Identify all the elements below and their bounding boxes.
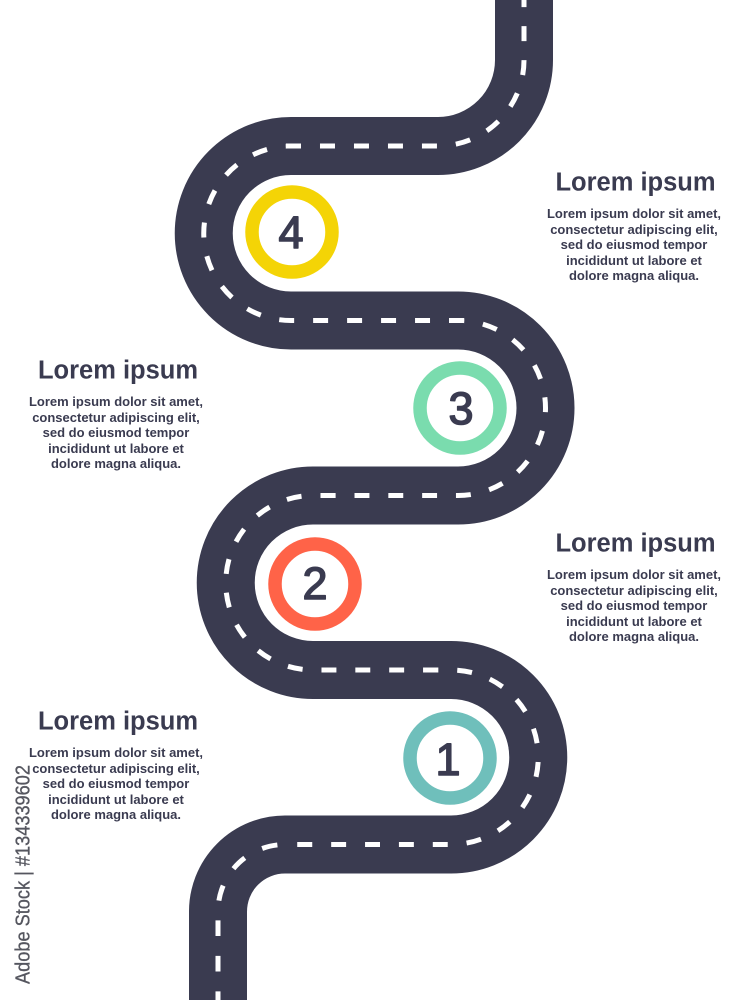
- text block: step 4: sed do eiusmod tempor: [561, 237, 707, 252]
- marker 2: [275, 544, 355, 624]
- text block: step 2: sed do eiusmod tempor: [561, 598, 707, 613]
- text block: step 2: dolore magna aliqua.: [569, 629, 699, 644]
- text block: step 2: Lorem ipsum: [555, 530, 716, 558]
- marker 2: 2: [302, 558, 328, 609]
- marker 3: 3: [448, 383, 474, 434]
- marker 4: 4: [278, 207, 304, 258]
- text block: step 4: incididunt ut labore et: [566, 253, 703, 268]
- text block: step 2: Lorem ipsum dolor sit amet,: [547, 567, 721, 582]
- marker 4: [252, 192, 332, 272]
- text block: step 4: Lorem ipsum dolor sit amet,: [547, 206, 721, 221]
- marker 3: [420, 368, 500, 448]
- text block: step 1: [29, 708, 203, 822]
- text block: step 1: consectetur adipiscing elit,: [32, 761, 200, 776]
- text block: step 1: incididunt ut labore et: [48, 792, 185, 807]
- text block: step 2: [547, 530, 721, 644]
- winding road: [204, 0, 546, 1000]
- stock credit: Adobe Stock | #134339602: [12, 765, 34, 984]
- text block: step 3: sed do eiusmod tempor: [43, 425, 189, 440]
- text block: step 1: dolore magna aliqua.: [51, 807, 181, 822]
- text block: step 1: sed do eiusmod tempor: [43, 776, 189, 791]
- text block: step 2: incididunt ut labore et: [566, 614, 703, 629]
- road centre dashes: [204, 0, 546, 1000]
- marker 1: [410, 718, 490, 798]
- text block: step 3: Lorem ipsum dolor sit amet,: [29, 394, 203, 409]
- text block: step 3: incididunt ut labore et: [48, 441, 185, 456]
- marker 1: 1: [435, 734, 461, 785]
- text block: step 3: dolore magna aliqua.: [51, 456, 181, 471]
- text block: step 3: consectetur adipiscing elit,: [32, 410, 200, 425]
- text block: step 4: Lorem ipsum: [555, 168, 716, 196]
- text block: step 1: Lorem ipsum: [38, 708, 198, 736]
- text block: step 4: dolore magna aliqua.: [569, 268, 699, 283]
- text block: step 4: consectetur adipiscing elit,: [550, 222, 718, 237]
- text block: step 2: consectetur adipiscing elit,: [550, 583, 718, 598]
- road surface: [204, 0, 546, 1000]
- text block: step 1: Lorem ipsum dolor sit amet,: [29, 745, 203, 760]
- text block: step 3: Lorem ipsum: [38, 356, 198, 384]
- text block: step 3: [29, 356, 203, 471]
- text block: step 4: [547, 168, 721, 283]
